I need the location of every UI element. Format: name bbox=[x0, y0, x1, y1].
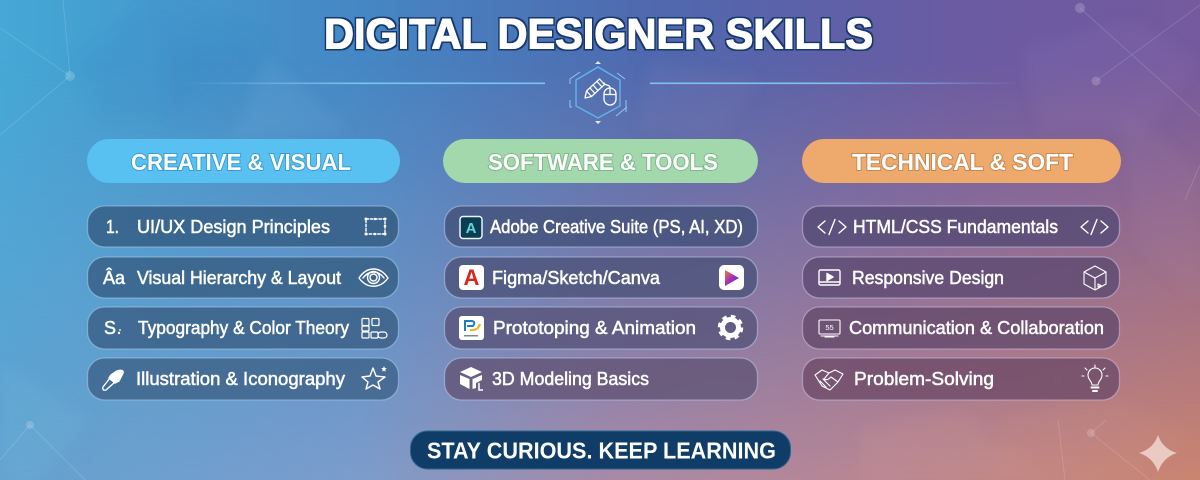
skill: responsive design: Responsive Design bbox=[852, 267, 1004, 288]
panel: creative and visual bbox=[87, 139, 400, 400]
skill: UI/UX design principles: UI/UX Design Principles bbox=[137, 216, 330, 237]
panel: technical and soft bbox=[802, 139, 1121, 400]
skill: UI/UX design principles bbox=[88, 206, 398, 247]
heading: software and tools bbox=[443, 139, 758, 183]
skill: problem solving: Problem-Solving bbox=[854, 368, 994, 389]
skill: 3D modeling basics: 3D Modeling Basics bbox=[492, 368, 649, 389]
title: DIGITAL DESIGNER SKILLS bbox=[324, 10, 873, 58]
skill: typography and color theory: Typography & Color Theory bbox=[138, 317, 350, 338]
skill: UI/UX design principles: 1. bbox=[106, 216, 119, 237]
divider left bbox=[180, 82, 545, 84]
skill: illustration and iconography: Illustration & Iconography bbox=[136, 368, 346, 389]
skill: prototyping and animation bbox=[444, 307, 758, 349]
divider right bbox=[650, 82, 1020, 84]
icon: hexagon with pencil and mouse bbox=[570, 61, 627, 124]
callout: stay curious bbox=[410, 431, 790, 469]
icon: sparkle bbox=[1139, 435, 1177, 472]
skill: HTML CSS fundamentals: HTML/CSS Fundamentals bbox=[853, 216, 1058, 237]
heading: creative and visual bbox=[87, 139, 400, 183]
skill: figma sketch canva bbox=[444, 257, 758, 298]
skill: visual hierarchy and layout bbox=[88, 257, 398, 298]
skill: adobe creative suite bbox=[444, 206, 758, 247]
skill: responsive design bbox=[802, 257, 1120, 298]
skill: adobe creative suite: Adobe Creative Suite (PS, AI, XD) bbox=[490, 216, 743, 237]
skill: visual hierarchy and layout: Visual Hierarchy & Layout bbox=[137, 267, 341, 288]
heading: software and tools: SOFTWARE & TOOLS bbox=[488, 149, 718, 175]
panel: software and tools bbox=[443, 139, 758, 400]
skill: illustration and iconography bbox=[88, 358, 398, 400]
skill: typography and color theory: S bbox=[104, 317, 116, 338]
heading: technical and soft bbox=[802, 139, 1121, 183]
skill: 3D modeling basics bbox=[444, 358, 758, 400]
skill: problem solving bbox=[802, 358, 1120, 400]
skill: adobe creative suite: A bbox=[466, 220, 477, 237]
heading: technical and soft: TECHNICAL & SOFT bbox=[852, 149, 1073, 175]
skill: prototyping and animation: Prototoping & Animation bbox=[493, 317, 696, 338]
heading: creative and visual: CREATIVE & VISUAL bbox=[131, 149, 351, 175]
skill: communication and collaboration: Communication & Collaboration bbox=[849, 317, 1104, 338]
skill: communication and collaboration bbox=[802, 307, 1120, 349]
skill: figma sketch canva: Figma/Sketch/Canva bbox=[492, 267, 661, 288]
skill: communication and collaboration: 55 bbox=[825, 323, 834, 332]
skill: figma sketch canva: A bbox=[464, 265, 480, 290]
skill: visual hierarchy and layout: Âa bbox=[103, 267, 126, 288]
skill: HTML CSS fundamentals bbox=[802, 206, 1120, 247]
callout: stay curious: STAY CURIOUS. KEEP LEARNING bbox=[427, 438, 776, 464]
skill: typography and color theory bbox=[88, 307, 398, 349]
